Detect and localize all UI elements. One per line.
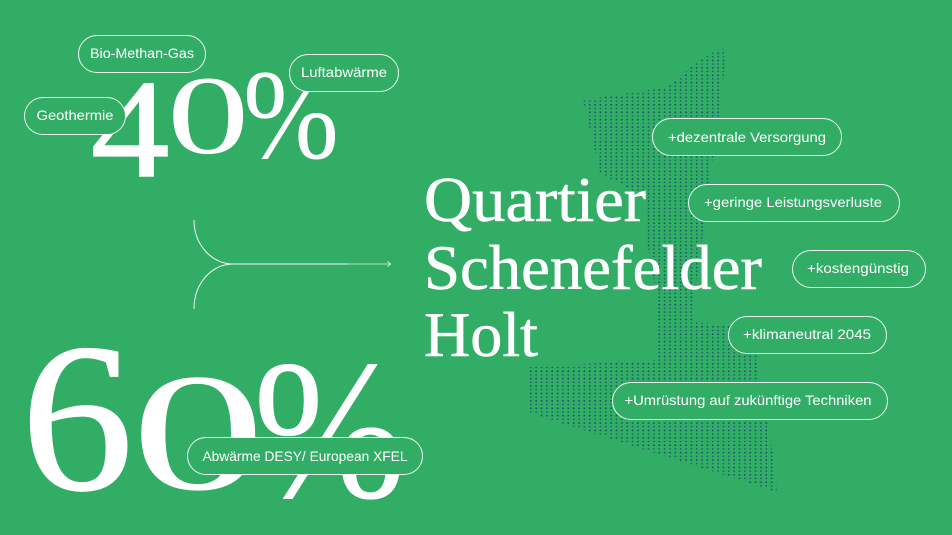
pill: Abwärme DESY / European XFEL: Abwärme DESY/ European XFEL <box>202 448 408 464</box>
title: Schenefelder <box>424 232 762 303</box>
arrow: merging flows <box>194 220 390 309</box>
title: Quartier <box>424 164 646 235</box>
pill: kostengünstig <box>792 250 926 288</box>
pill: geringe Leistungsverluste: +geringe Leistungsverluste <box>704 194 882 210</box>
statistic: 60 percent <box>21 301 406 535</box>
pill: Geothermie: Geothermie <box>36 107 114 123</box>
statistic: 60 percent: % <box>253 319 406 535</box>
dotted map shape <box>529 47 777 492</box>
statistic: 60 percent: 0 <box>131 340 265 526</box>
pill: dezentrale Versorgung <box>652 118 842 156</box>
pill: Umrüstung auf zukünftige Techniken: +Umrüstung auf zukünftige Techniken <box>624 392 872 408</box>
statistic: 40 percent: % <box>243 44 339 186</box>
pill: kostengünstig: +kostengünstig <box>807 260 909 276</box>
pill: Luftabwärme <box>290 54 398 92</box>
pill: geringe Leistungsverluste <box>688 184 900 222</box>
pill: klimaneutral 2045: +klimaneutral 2045 <box>743 326 871 342</box>
pill: dezentrale Versorgung: +dezentrale Versorgung <box>668 129 826 145</box>
statistic: 40 percent: 0 <box>167 54 249 178</box>
pill: Abwärme DESY / European XFEL <box>188 438 422 474</box>
pill: Luftabwärme: Luftabwärme <box>301 64 387 80</box>
statistic: 60 percent: 6 <box>21 301 133 535</box>
pill: Bio-Methan-Gas <box>78 36 206 72</box>
pill: Geothermie <box>24 98 126 134</box>
title: Holt <box>424 299 538 370</box>
pill: klimaneutral 2045 <box>728 316 886 354</box>
title <box>424 164 762 370</box>
statistic: 40 percent: 4 <box>91 53 169 207</box>
pill: Umrüstung auf zukünftige Techniken <box>612 382 888 420</box>
pill: Bio-Methan-Gas: Bio-Methan-Gas <box>90 45 194 61</box>
statistic: 40 percent <box>91 44 339 207</box>
